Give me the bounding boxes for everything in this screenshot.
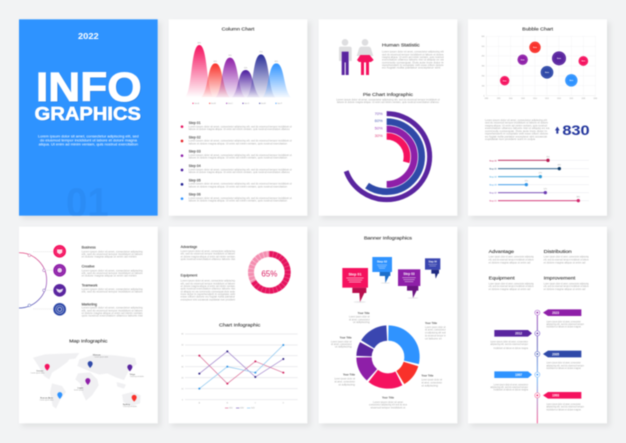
chart: line chart: A [199,402,201,405]
text: improvement: Improvement [544,275,576,280]
text: teamwork: Lorem ipsum dolor sit amet, consectetur adipiscing [82,288,143,291]
text: equipment: et dolore magna aliqua ut enim ad minim veniam [181,285,235,288]
panel: column chart page [169,19,307,216]
cover title: GRAPHICS: GRAPHICS [35,104,142,125]
chart: bubbles: Item [503,79,507,82]
icon: business [53,245,66,258]
chart: bubble grid: 2030 [581,98,585,100]
icon: teamwork [53,284,66,297]
step list: labore et dolore magna aliqua. Ut enim ad minim veniam, quis nostrud exercitation ullamco [189,171,290,174]
step list: labore et dolore magna aliqua. Ut enim ad minim veniam, quis nostrud exercitation [189,185,288,188]
text: business [82,246,143,259]
map labels: Lorem ipsum dolor [130,376,144,378]
chart: bubbles: Item [533,46,537,49]
quadrant: top left pages [19,19,307,226]
text: equipment: irure dolor in reprehenderit in voluptate velit [181,293,235,296]
tag: 1997: incididunt ut labore et dolore magna [494,389,529,392]
callout: lower left title [334,373,356,387]
text: advantage: elit, sed do eiusmod tempor incididunt ut labore [489,258,534,261]
tag: 2023: adipiscing elit, sed do eiusmod tempor [546,323,584,326]
callout: lower left title: sit amet, consectetur [334,380,355,383]
human statistic text: magna aliqua. Ut enim ad minim veniam, quis nostrud [382,56,444,59]
callout: top right title: Your Title [425,321,438,325]
diagram: semicircle connector [18,252,52,310]
callout: lower right title: ut adipiscing [421,384,439,387]
step list [181,121,292,203]
chart: line chart: D [283,403,285,405]
chart: bubble grid: 500 [482,46,484,48]
icon: marketing [53,303,66,316]
chart: radial bars [344,114,430,200]
text: business: Business [82,246,96,250]
text: improvement [544,275,589,291]
text: marketing [82,302,143,318]
tag: 2012: incididunt ut labore et dolore magna [494,347,529,350]
text: advantage: Lorem ipsum dolor sit amet, consectetur adipiscing [489,256,534,259]
chart: line chart: C [255,403,257,405]
line chart legend [225,408,255,410]
stat description: magna aliqua. Ut enim ad minim veniam, quis nostrud [485,124,548,127]
stat description: exercitation ullamco laboris nisi ut aliquip ex ea [485,127,550,130]
tag: 1993: Lorem ipsum dolor sit amet, consectetur [546,403,581,406]
stat description: sed do eiusmod tempor incididunt ut labore et dolore [485,122,549,125]
callout: lower left title: Lorem ipsum dolor sit [334,378,355,381]
text: advantage [181,245,236,261]
chart: bubble grid: 100 [482,85,484,87]
pie description: labore et dolore magna aliqua. Ut enim ad minim veniam, quis nostrud exercitation ullamco [337,101,440,104]
text: marketing: elit, sed do eiusmod tempor incididunt ut labore [82,309,143,312]
text: advantage: quis nostrud exercitation ullamco laboris nisi [181,258,235,261]
heading: Column Chart: Column Chart [222,27,255,32]
chart legend: Item E [261,102,267,105]
text: improvement: elit, sed do eiusmod tempor incididunt ut labore [544,285,589,288]
chart: step sliders: 88% [577,196,581,198]
step list: Step 02 [189,135,201,139]
banner: step 04: Step 04 [429,260,438,263]
cover description [38,134,139,147]
callout: top left title: ut adipiscing [353,321,370,324]
text: equipment: elit, sed do eiusmod tempor incididunt ut labore [181,282,236,285]
callout: bottom title: Lorem ipsum dolor sit amet [373,401,403,404]
text: improvement: et dolore magna aliqua ut enim ad [544,288,586,291]
step list: labore et dolore magna aliqua. Ut enim ad minim veniam, quis nostrud exercitation ullamco [189,128,290,131]
text: equipment: elit, sed do eiusmod tempor incididunt ut labore [489,285,534,288]
step list: labore et dolore magna aliqua. Ut enim ad minim veniam, quis nostrud exercitation [189,200,288,203]
icon: creative [53,264,66,277]
text: teamwork: elit, sed do eiusmod tempor incididunt ut labore [82,291,143,294]
step list: Lorem ipsum dolor sit amet, consectetur adipiscing elit, sed do eiusmod tempor incididunt ut [189,197,292,200]
text: distribution: Lorem ipsum dolor sit amet, consectetur adipiscing [544,256,589,259]
text: creative [82,265,143,278]
cover page number: 01 [66,180,109,226]
panel: timeline page [468,227,607,423]
stat description: commodo consequat. Duis aute irure dolor in [485,130,548,133]
step list: Lorem ipsum dolor sit amet, consectetur adipiscing elit, sed do eiusmod tempor incididunt ut [189,154,292,157]
step list: Lorem ipsum dolor sit amet, consectetur adipiscing elit, sed do eiusmod tempor incididunt ut [189,140,292,143]
cover description: do eiusmod tempor incididunt ut labore et dolore magna [40,139,137,143]
text: equipment: et dolore magna aliqua ut enim ad [489,288,531,291]
stat description: Lorem ipsum dolor sit amet, consectetur adipiscing elit [485,119,547,122]
chart: bubbles: Item [557,57,561,60]
callout: top left title [349,311,370,324]
chart: step sliders: Step 01 [489,200,497,203]
icon: male figure [339,39,352,75]
callout: lower right title: Your Title [421,374,434,378]
tag: 2012 [490,330,532,350]
text: marketing: quis nostrud exercitation ullamco laboris nisi [82,315,143,318]
chart: bubble grid: 600 [482,36,484,38]
step list: Step 01 [189,121,201,125]
chart: bubbles: Item [521,58,525,61]
panel: business and map page [0,227,158,423]
text: equipment [181,274,236,301]
human statistic text: commodo consequat. Duis aute irure dolor in [382,61,444,64]
callout: left title: Lorem ipsum dolor sit [331,340,352,343]
panel: bubble chart page [468,19,607,216]
chart: bubble grid: 2020 [557,98,561,100]
tag: 1993: 1993 [552,394,559,398]
map labels: Lorem ipsum [74,389,84,391]
chart: step sliders: Step 04 [489,176,497,179]
chart: bubble grid [482,36,597,100]
step list: Lorem ipsum dolor sit amet, consectetur adipiscing elit, sed do eiusmod tempor incididunt ut [189,125,292,128]
map labels: Warsaw [93,353,101,356]
chart: bubble grid: 1990 [484,98,488,100]
heading: Chart Infographic: Chart Infographic [219,323,261,328]
chart: line chart: 20 [181,377,183,379]
cover description: aliqua. Ut enim ad minim veniam, quis nostrud exercitation [39,143,138,147]
chart: bubble grid: 2015 [545,98,549,100]
tag: 2012: adipiscing elit, sed do eiusmod tempor [490,343,528,346]
tag: 2023: incididunt ut labore et dolore magna [546,326,581,329]
text: distribution [544,249,589,264]
tag: 2005 [543,351,584,370]
radial bar labels: 70% [375,111,383,116]
line chart legend: 2022 [251,408,255,410]
chart: bubble grid: 1995 [497,98,501,100]
heading: Human Statistic: Human Statistic [382,42,421,47]
text: marketing: et dolore magna aliqua ut enim ad minim veniam [82,312,143,315]
chart: bubble grid: 300 [482,66,484,68]
chart: line chart: 30 [181,366,183,368]
chart: step sliders: Step 02 [489,192,497,195]
chart: bubbles [500,42,588,86]
text: business: et dolore magna aliqua ut enim ad minim [82,256,137,259]
text: advantage: Advantage [489,249,515,254]
text: teamwork [82,284,143,294]
callout: top left title: Your Title [358,311,370,315]
chart: step sliders [489,156,589,203]
step list: Step 05 [189,178,201,182]
human statistic text [382,51,444,70]
chart: step sliders: Step 03 [489,184,497,187]
step list: Step 03 [189,150,201,154]
chart: line chart: 10 [181,388,183,390]
tag: 2005: Lorem ipsum dolor sit amet, consectetur [546,362,581,365]
chart: bubble grid: 2005 [521,98,525,100]
radial bar labels: 50% [375,126,383,131]
timeline nodes [535,310,540,398]
pie description [336,98,440,104]
human statistic text: reprehenderit in voluptate velit esse cillum dolore [382,64,444,67]
step list: labore et dolore magna aliqua. Ut enim ad minim veniam, quis nostrud exercitation [189,142,288,145]
heading: Bubble Chart: Bubble Chart [522,27,554,32]
chart: bubble grid: 400 [482,56,484,58]
chart: bubble grid: 2035 [593,98,597,100]
text: marketing: Marketing [82,302,97,306]
panel: human statistic and pie page [319,19,457,216]
radial bar labels: 60% [375,118,383,123]
text: creative: elit, sed do eiusmod tempor incididunt ut labore [82,272,143,275]
human statistic text: exercitation ullamco laboris nisi ut aliquip ex ea [382,59,444,62]
callout: top right title: Lorem ipsum dolor sit [425,326,446,329]
chart: bubble grid: 2025 [569,98,573,100]
timeline axis [537,313,538,423]
map labels: Buenos Aires [40,396,53,399]
text: improvement: Lorem ipsum dolor sit amet, consectetur adipiscing [544,282,589,285]
text: creative: et dolore magna aliqua ut enim ad minim [82,275,137,278]
chart: step sliders: 47% [539,172,543,174]
text: equipment: excepteur sint occaecat cupidatat non proident [181,298,235,301]
callout: top left title: Lorem ipsum dolor sit [349,316,370,319]
banner: step 01: Step 01 [348,272,362,276]
heading: Banner Infographics: Banner Infographics [364,235,413,240]
chart: bubble grid: 200 [482,76,484,78]
text: equipment: esse cillum dolore eu fugiat nulla pariatur [181,296,235,299]
human statistic text: eu fugiat nulla pariatur excepteur sint [382,67,441,70]
text: distribution: et dolore magna aliqua ut enim ad [544,261,586,264]
step list: labore et dolore magna aliqua. Ut enim ad minim veniam, quis nostrud exercitation [189,157,288,160]
callout: top left title: sit amet, consectetur [349,318,370,321]
tag: 1993: adipiscing elit, sed do eiusmod tempor [546,406,584,409]
chart legend [192,102,282,105]
chart: step sliders: 52% [544,188,548,190]
text: equipment: Equipment [489,275,516,280]
tag: 2005: incididunt ut labore et dolore magna [546,367,581,370]
tag: 2023 [543,309,584,329]
cover title: INFO: INFO [36,64,142,110]
heading: Pie Chart Infographic: Pie Chart Infographic [363,92,414,97]
chart: bubble grid: 2010 [533,98,537,100]
text: advantage [489,249,534,264]
tag: 2005: 2005 [552,352,559,356]
chart: bell columns: 75% [259,52,263,54]
text: marketing: Lorem ipsum dolor sit amet, consectetur adipiscing [82,307,143,310]
chart: line chart: 0 [182,399,183,401]
callout: lower right title: Lorem ipsum dolor sit [421,379,442,382]
chart: bell columns: 60% [275,61,279,63]
heading: Map Infographic: Map Infographic [69,339,108,344]
text: equipment: Lorem ipsum dolor sit amet, consectetur adipiscing [181,280,236,283]
chart: step sliders: Step 06 [489,159,497,162]
chart: step sliders: 31% [525,180,529,182]
panel: donut and line chart page [169,227,307,423]
chart: line chart: 60 [181,334,183,336]
chart: line chart: 40 [181,355,183,357]
callout: lower left title: ut adipiscing [338,384,356,387]
chart: bubble grid: 0 [484,95,485,97]
chart: step sliders: 68% [558,164,562,166]
radial bar labels: 30% [375,133,383,138]
tag: 2023: Lorem ipsum dolor sit amet, consectetur [546,320,581,323]
text: advantage: Lorem ipsum dolor sit amet, consectetur adipiscing [181,250,236,253]
cover description: Lorem ipsum dolor sit amet, consectetur adipiscing elit, sed [38,134,139,138]
tag: 2012: Lorem ipsum dolor sit amet, consectetur [490,340,528,343]
stat description: cupidatat non proident sunt in culpa [485,138,536,141]
text: advantage: et dolore magna aliqua ut enim ad [489,261,531,264]
chart legend: Item C [228,102,234,105]
tag: 2023: 2023 [552,311,559,315]
callout: lower right title [421,374,442,387]
banner: step 03 [398,269,420,299]
chart: 65% gauge [251,254,288,291]
chart: bell columns [185,43,291,97]
human statistic text: Lorem ipsum dolor sit amet, consectetur adipiscing elit [382,51,444,54]
chart: bubbles: Item [569,79,574,82]
radial bar labels [375,111,383,138]
map labels [31,353,144,408]
stat number 830: 830 [562,122,590,138]
chart legend: Item B [211,102,217,105]
cover year: 2022 [78,31,99,41]
chart: bubbles: Item [581,60,586,63]
text: advantage: et dolore magna aliqua ut enim ad minim veniam [181,255,235,258]
banner: step 02 [372,257,392,284]
text: equipment [489,275,534,291]
chart: step sliders: 55% [546,156,550,158]
human statistic text: sed do eiusmod tempor incididunt ut labore et dolore [382,53,444,56]
tag: 1997 [490,371,532,392]
cover title: INFO: INFO [37,65,142,111]
callout: top right title: ut adipiscing elit sed [425,332,446,335]
stat description: eu fugiat nulla pariatur excepteur sint occaecat [485,135,547,138]
text: equipment: ut aliquip ex ea commodo consequat duis aute [181,290,236,293]
step list: Step 04 [189,164,201,168]
chart legend: Item A [194,102,200,105]
chart: bell columns: 70% [228,55,232,57]
icon: up arrow [555,127,560,134]
text: teamwork: Teamwork [82,284,98,288]
map labels: Lorem ipsum dolor [94,356,109,358]
banner: step 02: Step 02 [377,260,387,264]
tag: 1997: Lorem ipsum dolor sit amet, consectetur [494,383,528,386]
step list: Step 06 [189,193,201,197]
icon: female figure [357,39,374,75]
text: creative: Creative [82,265,95,269]
callout: bottom title [369,396,408,409]
text: business: Lorem ipsum dolor sit amet, consectetur adipiscing [82,250,143,253]
text: distribution: Distribution [544,249,572,254]
banner: step 03: Step 03 [403,272,415,276]
callout: left title: Your Title [340,336,352,340]
callout: bottom title: eiusmod tempor incididunt ut [371,406,406,409]
tag: 2005: adipiscing elit, sed do eiusmod tempor [546,364,584,367]
cover title: GRAPHICS: GRAPHICS [35,103,141,124]
chart: line chart: 50 [181,345,183,347]
chart: step sliders: Step 05 [489,168,497,171]
callout: left title: sit amet, consectetur [331,343,352,346]
tag: 1993: incididunt ut labore et dolore magna [546,408,581,411]
callout: top right title [425,321,446,340]
callout: bottom title: consectetur adipiscing elit sed do eius [369,404,408,407]
chart: segmented donut [354,323,422,391]
callout: top right title: sit amet, consectetur [425,329,446,332]
chart: bubble grid: 2000 [509,98,513,100]
chart legend: Item D [244,102,250,105]
text: equipment: Lorem ipsum dolor sit amet, consectetur adipiscing [489,282,534,285]
text: distribution: elit, sed do eiusmod tempor incididunt ut labore [544,258,589,261]
chart: bell columns: 50% [244,67,248,69]
quadrant: top right pages [319,19,607,216]
callout: left title [331,336,352,349]
text: equipment: quis nostrud exercitation ullamco laboris nisi [181,288,235,291]
line chart legend: 2018 [240,408,244,410]
text: equipment: Equipment [181,274,197,278]
pie description: Lorem ipsum dolor sit amet, consectetur adipiscing elit, sed do eiusmod tempor incididunt ut [336,98,440,101]
tag: 1997: adipiscing elit, sed do eiusmod tempor [490,386,528,389]
callout: bottom title: Your Title [382,396,395,400]
quadrant: bottom left pages [0,227,307,423]
callout: top right title: ut labore et [425,337,442,340]
chart legend: Item F [277,102,282,105]
chart: line chart [181,334,298,405]
text: advantage: Advantage [181,245,197,249]
text: creative: Lorem ipsum dolor sit amet, consectetur adipiscing [82,269,143,272]
chart: bubbles: Item [545,71,549,74]
stat description [485,119,550,141]
chart: 65% gauge: 65% [261,269,277,278]
panel: blue cover [19,19,158,226]
line chart legend: 2012 [229,408,233,410]
map labels: Sydney [123,404,131,406]
text: advantage: elit, sed do eiusmod tempor incididunt ut labore [181,253,236,256]
chart: line chart: B [227,403,229,405]
tag: 1997: 1997 [515,373,522,377]
text: business: elit, sed do eiusmod tempor incididunt ut labore [82,253,143,256]
banner: step 04 [425,258,440,279]
tag: 1993 [543,392,584,411]
quadrant: bottom right pages [319,227,607,423]
map labels: Lorem ipsum dolor [31,373,45,375]
panel: banner page [319,227,457,423]
tag: 2012: 2012 [515,332,522,336]
callout: lower left title: Your Title [343,373,356,377]
step list: Lorem ipsum dolor sit amet, consectetur adipiscing elit, sed do eiusmod tempor incididunt ut [189,183,292,186]
chart: bell columns: 80% [198,43,202,45]
map labels: Denver [37,370,44,373]
map labels: Lorem ipsum dolor [40,400,54,402]
chart: bell columns: 60% [214,61,218,63]
map labels: Lagos [77,387,83,389]
map labels: Tokyo [130,374,136,376]
map pins [45,361,137,402]
callout: top right title: do eiusmod tempor in [425,334,446,337]
banner: step 01 [342,268,368,303]
chart: world map [33,353,141,409]
map labels: Lorem ipsum dolor [123,406,137,408]
callout: left title: ut adipiscing [335,346,352,349]
stat description: reprehenderit in voluptate velit esse cillum dolore [485,133,549,136]
callout: lower right title: sit amet, consectetur [421,381,442,384]
step list: Lorem ipsum dolor sit amet, consectetur adipiscing elit, sed do eiusmod tempor incididunt ut [189,168,292,171]
